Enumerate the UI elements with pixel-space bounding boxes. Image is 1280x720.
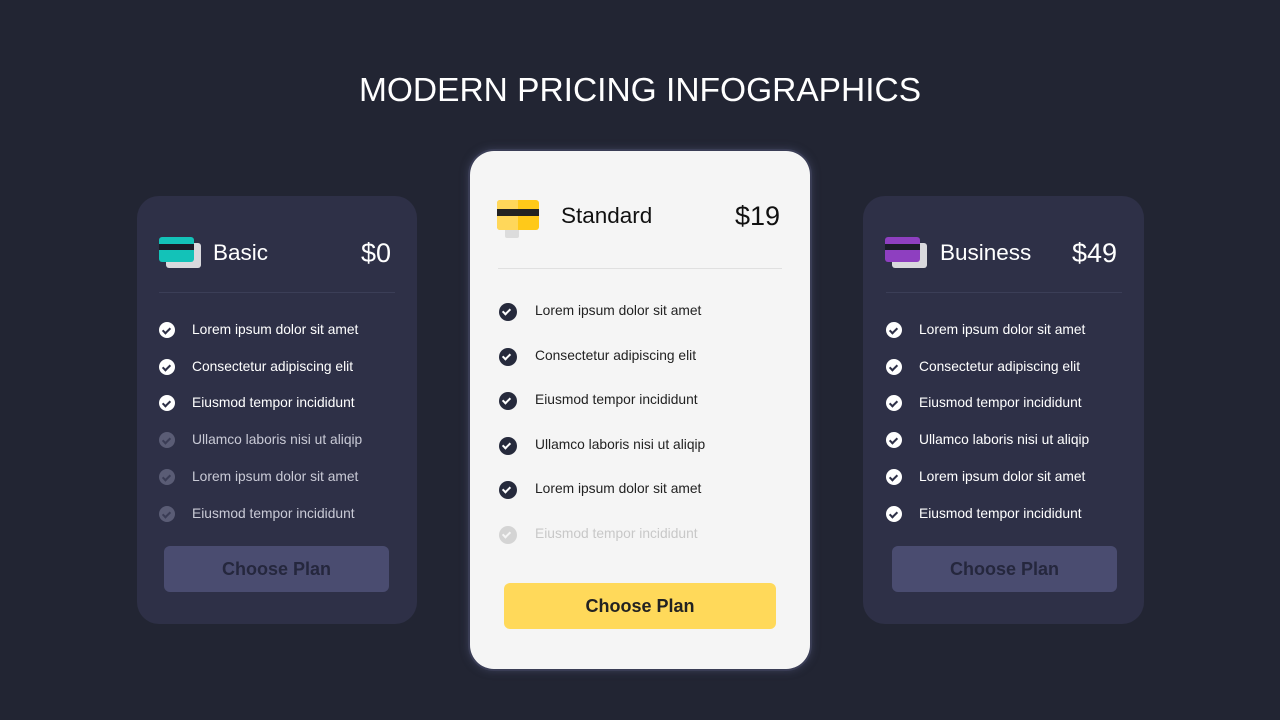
feature list: Lorem ipsum dolor sit amet (919, 322, 1085, 337)
feature list: Eiusmod tempor incididunt (535, 392, 698, 407)
feature list: Ullamco laboris nisi ut aliqip (919, 432, 1089, 447)
feature list: Consectetur adipiscing elit (192, 359, 353, 374)
heading: Business: Business (940, 240, 1031, 265)
feature list (886, 322, 1089, 522)
feature list: Ullamco laboris nisi ut aliqip (192, 432, 362, 447)
feature list: Lorem ipsum dolor sit amet (192, 469, 358, 484)
price: $49: $49 (1072, 238, 1117, 268)
icon: yellow card (497, 200, 539, 238)
feature list: Ullamco laboris nisi ut aliqip (535, 437, 705, 452)
feature list: Lorem ipsum dolor sit amet (535, 303, 701, 318)
panel: business (863, 196, 1144, 624)
feature list: Consectetur adipiscing elit (535, 348, 696, 363)
button: Choose Plan (585, 596, 695, 616)
feature list: Eiusmod tempor incididunt (535, 526, 698, 541)
panel: standard (470, 151, 810, 669)
heading: Basic: Basic (213, 240, 268, 265)
feature list: Lorem ipsum dolor sit amet (535, 481, 701, 496)
feature list (159, 322, 362, 522)
button (164, 546, 389, 592)
feature list: Consectetur adipiscing elit (919, 359, 1080, 374)
feature list: Eiusmod tempor incididunt (919, 395, 1082, 410)
icon: teal card (159, 237, 201, 268)
button: Choose Plan (950, 559, 1059, 579)
icon: purple card (885, 237, 927, 268)
panel: basic (137, 196, 417, 624)
feature list (499, 303, 705, 544)
feature list: Eiusmod tempor incididunt (919, 506, 1082, 521)
feature list: Lorem ipsum dolor sit amet (919, 469, 1085, 484)
button: Choose Plan (222, 559, 331, 579)
feature list: Eiusmod tempor incididunt (192, 506, 355, 521)
feature list: Eiusmod tempor incididunt (192, 395, 355, 410)
price: $19: $19 (735, 201, 780, 231)
button (892, 546, 1117, 592)
title: MODERN PRICING INFOGRAPHICS (359, 72, 921, 109)
button (504, 583, 776, 629)
price: $0: $0 (361, 238, 391, 268)
heading: Standard: Standard (561, 203, 652, 228)
feature list: Lorem ipsum dolor sit amet (192, 322, 358, 337)
